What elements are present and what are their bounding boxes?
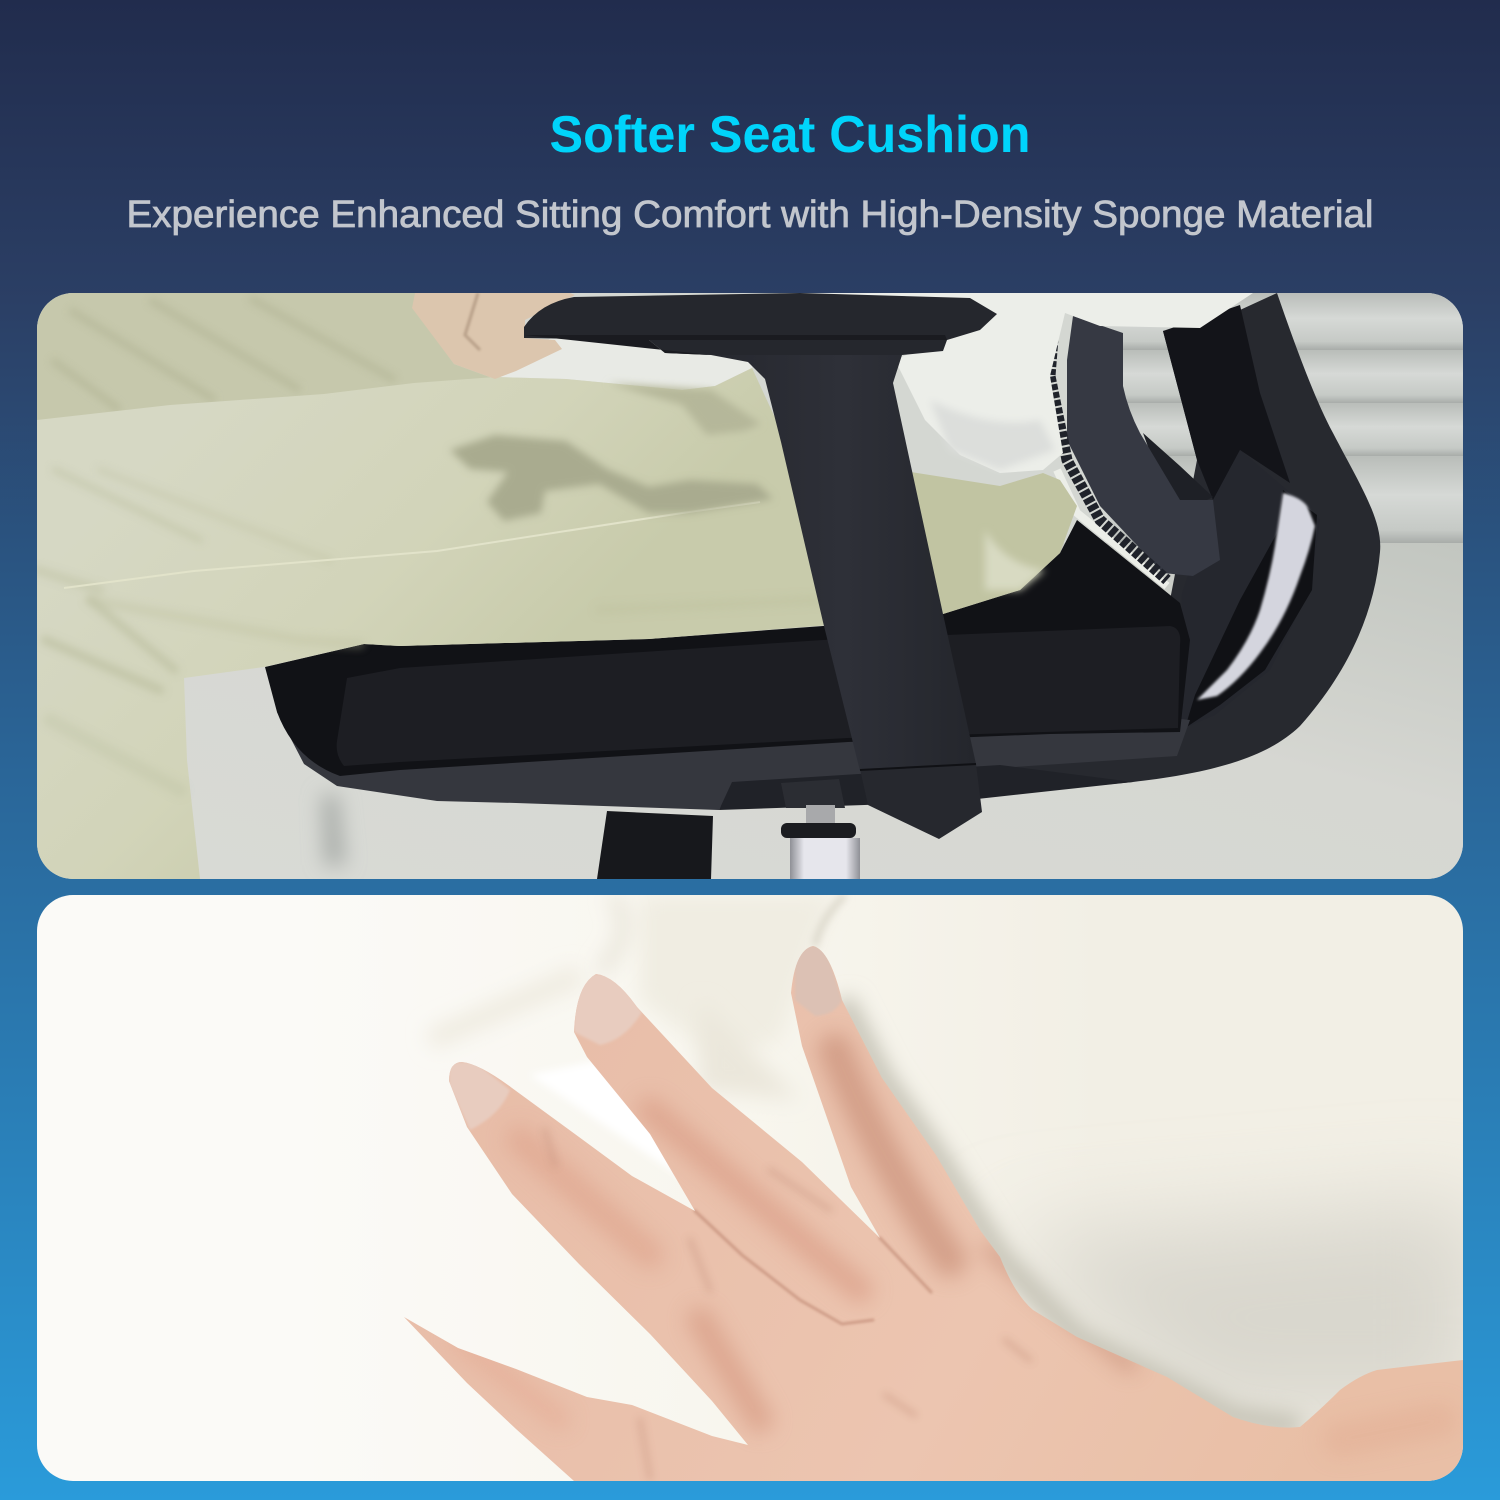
subtitle: Experience Enhanced Sitting Comfort with High-Density Sponge Material (126, 194, 1374, 236)
armrest post (711, 355, 976, 771)
title: Softer Seat Cushion (550, 106, 1030, 164)
window blinds (1110, 293, 1463, 543)
white band under armrest (501, 338, 752, 389)
lumbar wedge (1143, 433, 1212, 500)
panel: chair photo (37, 293, 1463, 879)
trouser seam (64, 502, 760, 588)
hand (380, 930, 1463, 1481)
panel: foam photo (37, 895, 1480, 1481)
frame teeth (1050, 313, 1167, 580)
gas lift (781, 779, 860, 879)
armrest base (860, 764, 982, 839)
trousers far leg (37, 293, 495, 425)
cylinder column (597, 811, 713, 879)
trouser fold dark (607, 383, 761, 435)
floor (1061, 543, 1463, 879)
mesh (1197, 493, 1315, 700)
armrest pad (524, 293, 997, 355)
white shirt (780, 293, 1253, 473)
mesh frame band (1067, 316, 1220, 576)
hand on armrest (412, 293, 575, 379)
bright pressed foam (539, 1063, 670, 1170)
nails (449, 946, 842, 1130)
foam shadows (430, 895, 1480, 1427)
trousers near leg (37, 368, 830, 879)
chair back (1000, 293, 1380, 795)
white strip under frame (1057, 470, 1167, 586)
seat pan (277, 712, 1190, 810)
trouser fold shading (37, 468, 368, 742)
hand shading (449, 946, 1440, 1478)
trouser dark patch (450, 435, 773, 521)
seat cushion (265, 520, 1190, 776)
creases (695, 1211, 931, 1324)
